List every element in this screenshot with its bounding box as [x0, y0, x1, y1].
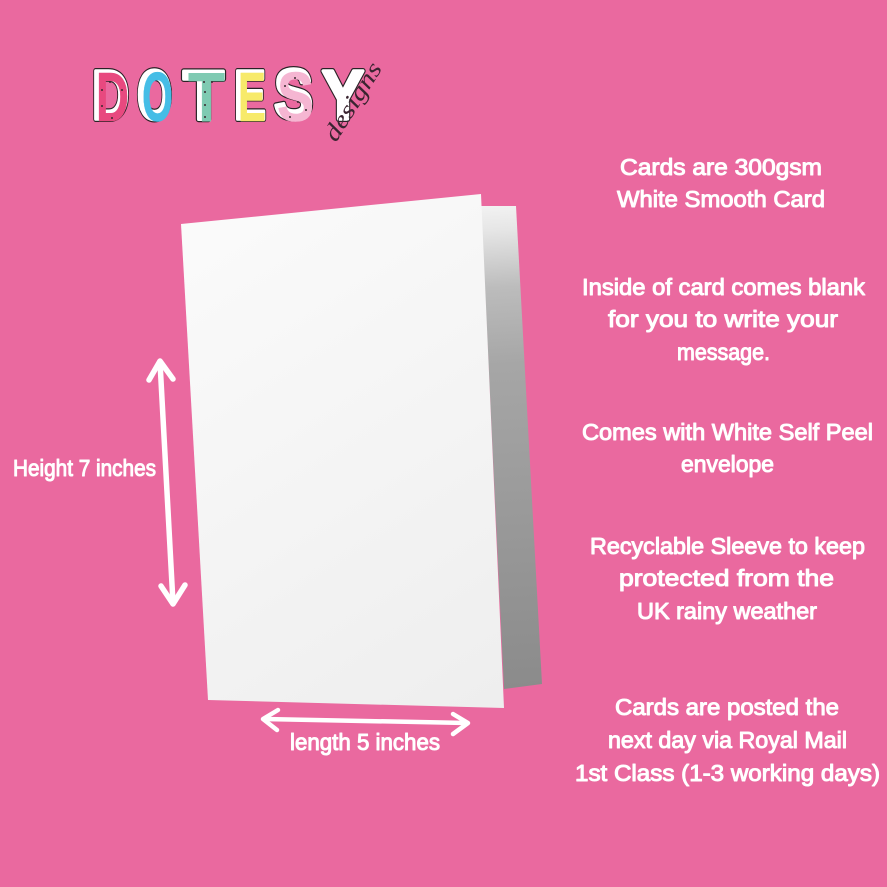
- card illustration: [181, 194, 542, 708]
- logo: Dotesy designs: T: [183, 56, 224, 134]
- logo: Dotesy designs: designs: [319, 58, 388, 146]
- logo: Dotesy designs: T: [183, 56, 224, 134]
- arrow: length: [263, 710, 468, 734]
- logo: Dotesy designs: T: [188, 58, 225, 136]
- logo: Dotesy designs: S: [274, 55, 313, 133]
- logo: Dotesy designs: O: [137, 56, 172, 134]
- label: height: Height 7 inches: [13, 455, 156, 481]
- text: envelope: [582, 419, 873, 477]
- text: inside of card: for you to write your: [608, 306, 838, 332]
- logo: Dotesy designs: D: [96, 58, 129, 136]
- card front panel: [181, 194, 504, 708]
- arrow: height: [149, 361, 185, 604]
- logo: Dotesy designs: E: [234, 56, 266, 134]
- text: card stock: White Smooth Card: [617, 186, 825, 212]
- text: envelope: envelope: [681, 451, 774, 477]
- logo: Dotesy designs: [92, 55, 388, 146]
- logo: Dotesy designs: E: [234, 56, 266, 134]
- text: sleeve: UK rainy weather: [637, 598, 817, 624]
- text: postage: Cards are posted the: [615, 694, 839, 720]
- logo: Dotesy designs: D: [92, 56, 129, 134]
- card back panel: [481, 206, 542, 689]
- text: sleeve: protected from the: [619, 565, 834, 591]
- text: postage: next day via Royal Mail: [608, 727, 847, 753]
- logo: Dotesy designs: O: [142, 58, 173, 136]
- logo: Dotesy designs: E: [238, 58, 266, 136]
- text: inside of card: message.: [677, 339, 770, 365]
- text: card stock: Cards are 300gsm: [620, 154, 822, 180]
- logo: Dotesy designs: O: [137, 56, 172, 134]
- text: inside of card: Inside of card comes blank: [582, 274, 866, 300]
- label: length: length 5 inches: [290, 729, 440, 755]
- logo: Dotesy designs: D: [92, 56, 129, 134]
- logo: Dotesy designs: Y: [322, 56, 364, 134]
- text: inside of card: [582, 274, 866, 365]
- text: sleeve: Recyclable Sleeve to keep: [590, 533, 865, 559]
- text: envelope: Comes with White Self Peel: [582, 419, 873, 445]
- logo: Dotesy designs: S: [274, 55, 313, 133]
- text: postage: 1st Class (1-3 working days): [575, 760, 880, 786]
- text: card stock: [617, 154, 825, 212]
- text: postage: [575, 694, 880, 786]
- text: sleeve: [590, 533, 865, 624]
- logo: Dotesy designs: S: [277, 58, 314, 136]
- logo: Dotesy designs: Y: [322, 56, 364, 134]
